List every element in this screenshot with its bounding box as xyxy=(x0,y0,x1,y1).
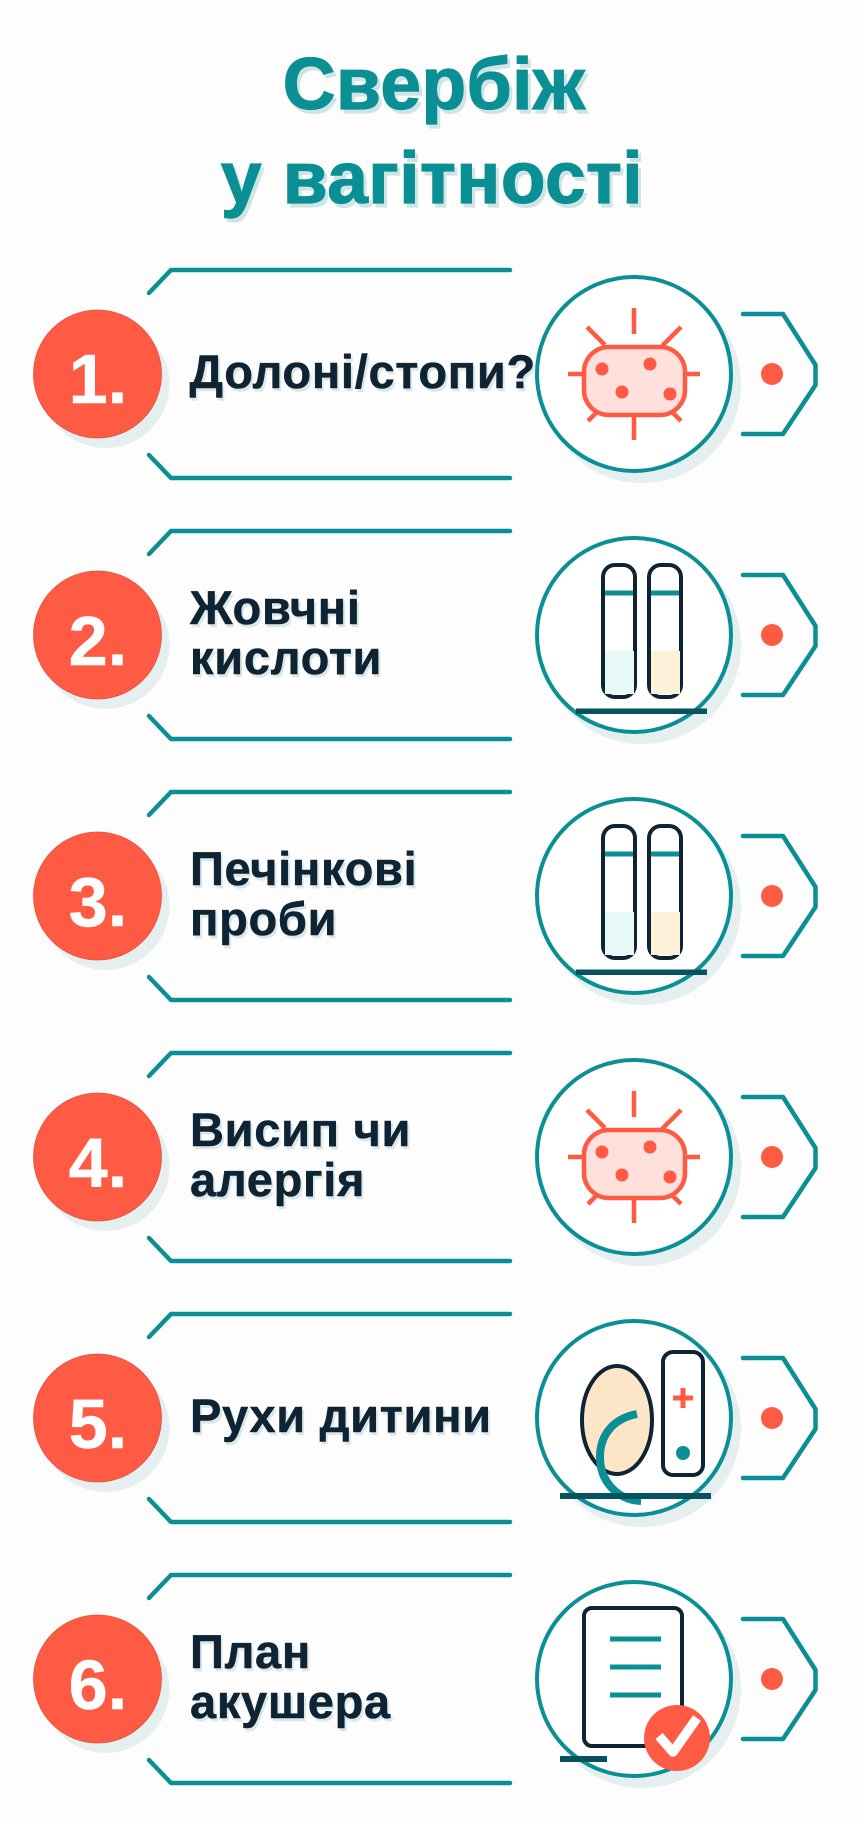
label: Долоні/стопи? xyxy=(190,345,536,398)
number badge xyxy=(34,571,170,709)
arrow bracket with dot xyxy=(743,1358,816,1478)
number badge: 4. xyxy=(69,1124,127,1202)
arrow bracket with dot xyxy=(743,1097,816,1217)
title xyxy=(221,44,643,219)
number badge: 3. xyxy=(69,863,127,941)
icon: document with check xyxy=(537,1582,741,1788)
icon: pregnancy and monitor xyxy=(537,1321,741,1527)
row 1: palms and soles xyxy=(34,270,816,483)
number badge: 5. xyxy=(69,1385,127,1463)
row 2: bile acids xyxy=(34,531,816,744)
row 6: obstetrician plan xyxy=(34,1575,816,1788)
icon: rash xyxy=(537,1060,741,1266)
bracket lines xyxy=(149,1053,510,1261)
icon: test tubes xyxy=(537,538,741,744)
label: Жовчні xyxy=(189,581,361,634)
label: алергія xyxy=(190,1153,365,1206)
label: Висип чи xyxy=(190,1103,411,1156)
icon: rash xyxy=(537,277,741,483)
row 3: liver tests xyxy=(34,792,816,1005)
bracket lines xyxy=(149,792,510,1000)
row 5: baby movements xyxy=(34,1314,816,1527)
label: Рухи дитини xyxy=(190,1389,492,1442)
bracket lines xyxy=(149,270,510,478)
number badge xyxy=(34,1354,170,1492)
title: у вагітності xyxy=(221,138,643,219)
number badge xyxy=(34,1615,170,1753)
arrow bracket with dot xyxy=(743,1619,816,1739)
number badge xyxy=(34,310,170,448)
number badge xyxy=(34,832,170,970)
icon: test tubes xyxy=(537,799,741,1005)
bracket lines xyxy=(149,1575,510,1783)
title: Свербіж xyxy=(283,44,586,125)
number badge: 6. xyxy=(69,1646,127,1724)
bracket lines xyxy=(149,531,510,739)
number badge: 1. xyxy=(69,340,127,418)
label: План xyxy=(190,1625,311,1678)
label: акушера xyxy=(190,1675,391,1728)
arrow bracket with dot xyxy=(743,575,816,695)
arrow bracket with dot xyxy=(743,314,816,434)
row 4: rash or allergy xyxy=(34,1053,816,1266)
arrow bracket with dot xyxy=(743,836,816,956)
label: Печінкові xyxy=(190,842,417,895)
bracket lines xyxy=(149,1314,510,1522)
label: кислоти xyxy=(190,631,382,684)
number badge: 2. xyxy=(69,602,127,680)
label: проби xyxy=(190,892,337,945)
number badge xyxy=(34,1093,170,1231)
